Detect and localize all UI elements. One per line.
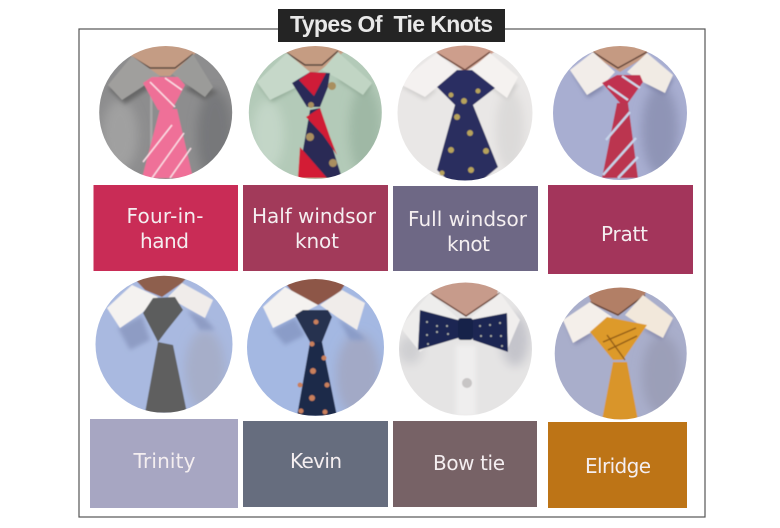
label: Full windsor knot: Full windsor (408, 207, 528, 231)
photo: four-in-hand knot on grey shirt (99, 46, 232, 179)
panel: half windsor knot (243, 42, 388, 271)
photo: trinity knot on blue shirt (94, 274, 234, 414)
panel: trinity (90, 274, 238, 508)
label: Bow tie: Bow tie (433, 451, 505, 475)
photo: bow tie on white shirt (397, 281, 535, 417)
label: Four-in-hand (94, 185, 238, 271)
label: Trinity (90, 419, 238, 508)
label: Pratt (548, 185, 693, 274)
label: Trinity: Trinity (132, 449, 196, 473)
panel: full windsor knot (393, 44, 538, 271)
label: Pratt: Pratt (601, 222, 648, 246)
label: Half windsor knot (243, 185, 388, 271)
label: Full windsor knot (393, 186, 538, 271)
label: Kevin (243, 421, 388, 507)
panel: pratt (548, 45, 693, 274)
label: Elridge (548, 422, 687, 508)
label: Four-in-hand: Four-in- (126, 204, 204, 228)
label: Half windsor knot: knot (295, 229, 339, 253)
panel: bow tie (393, 281, 537, 507)
label: Bow tie (393, 421, 537, 507)
panel: kevin (243, 277, 388, 507)
photo: full windsor knot on white shirt (396, 44, 534, 182)
title: Types Of Tie Knots (290, 11, 493, 37)
photo: eldredge knot on blue shirt (553, 286, 689, 422)
label: Half windsor knot: Half windsor (252, 204, 377, 228)
photo: half windsor knot on mint shirt (248, 46, 382, 179)
label: Elridge: Elridge (585, 454, 651, 478)
outer frame (79, 29, 705, 517)
photo: pratt knot on blue shirt (552, 45, 688, 181)
label: Full windsor knot: knot (447, 232, 490, 256)
label: Four-in-hand: hand (140, 229, 189, 253)
panel: four-in-hand (94, 42, 238, 271)
panel: eldredge (548, 286, 689, 508)
label: Kevin: Kevin (290, 449, 342, 473)
photo: kevin knot on blue shirt (245, 277, 387, 419)
